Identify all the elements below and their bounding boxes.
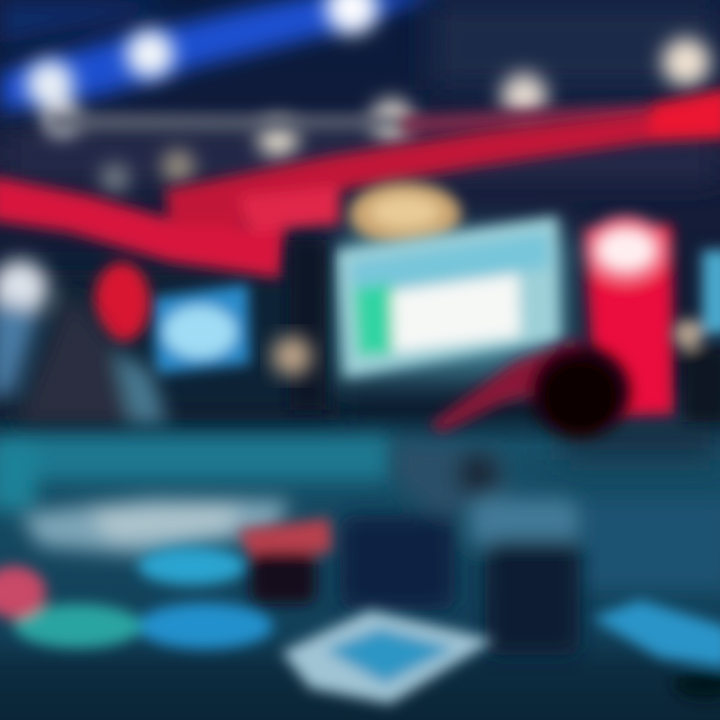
tan arch above screen <box>349 182 461 246</box>
warm small light <box>272 336 312 376</box>
central screen <box>336 216 560 378</box>
stage floor band <box>0 436 720 590</box>
panel: upper wall tones <box>0 0 720 460</box>
dark red figure with arm <box>430 338 630 438</box>
white table surface <box>20 498 290 556</box>
foreground blue tablets <box>0 547 273 649</box>
foreground centre tray <box>282 610 494 704</box>
left figure and light <box>0 260 168 424</box>
blue ceiling band <box>0 0 440 112</box>
red post left <box>94 262 150 342</box>
ceiling lights <box>26 0 710 192</box>
foreground seated figures <box>340 440 580 655</box>
left blue screen <box>152 284 250 374</box>
right edge blue screen <box>673 250 720 422</box>
right red pillar <box>584 216 674 416</box>
grey banner strip <box>48 104 650 134</box>
foreground right tablet <box>592 600 720 700</box>
red ribbon banners <box>0 88 720 278</box>
dark column <box>290 240 326 410</box>
red device on table <box>238 518 332 604</box>
